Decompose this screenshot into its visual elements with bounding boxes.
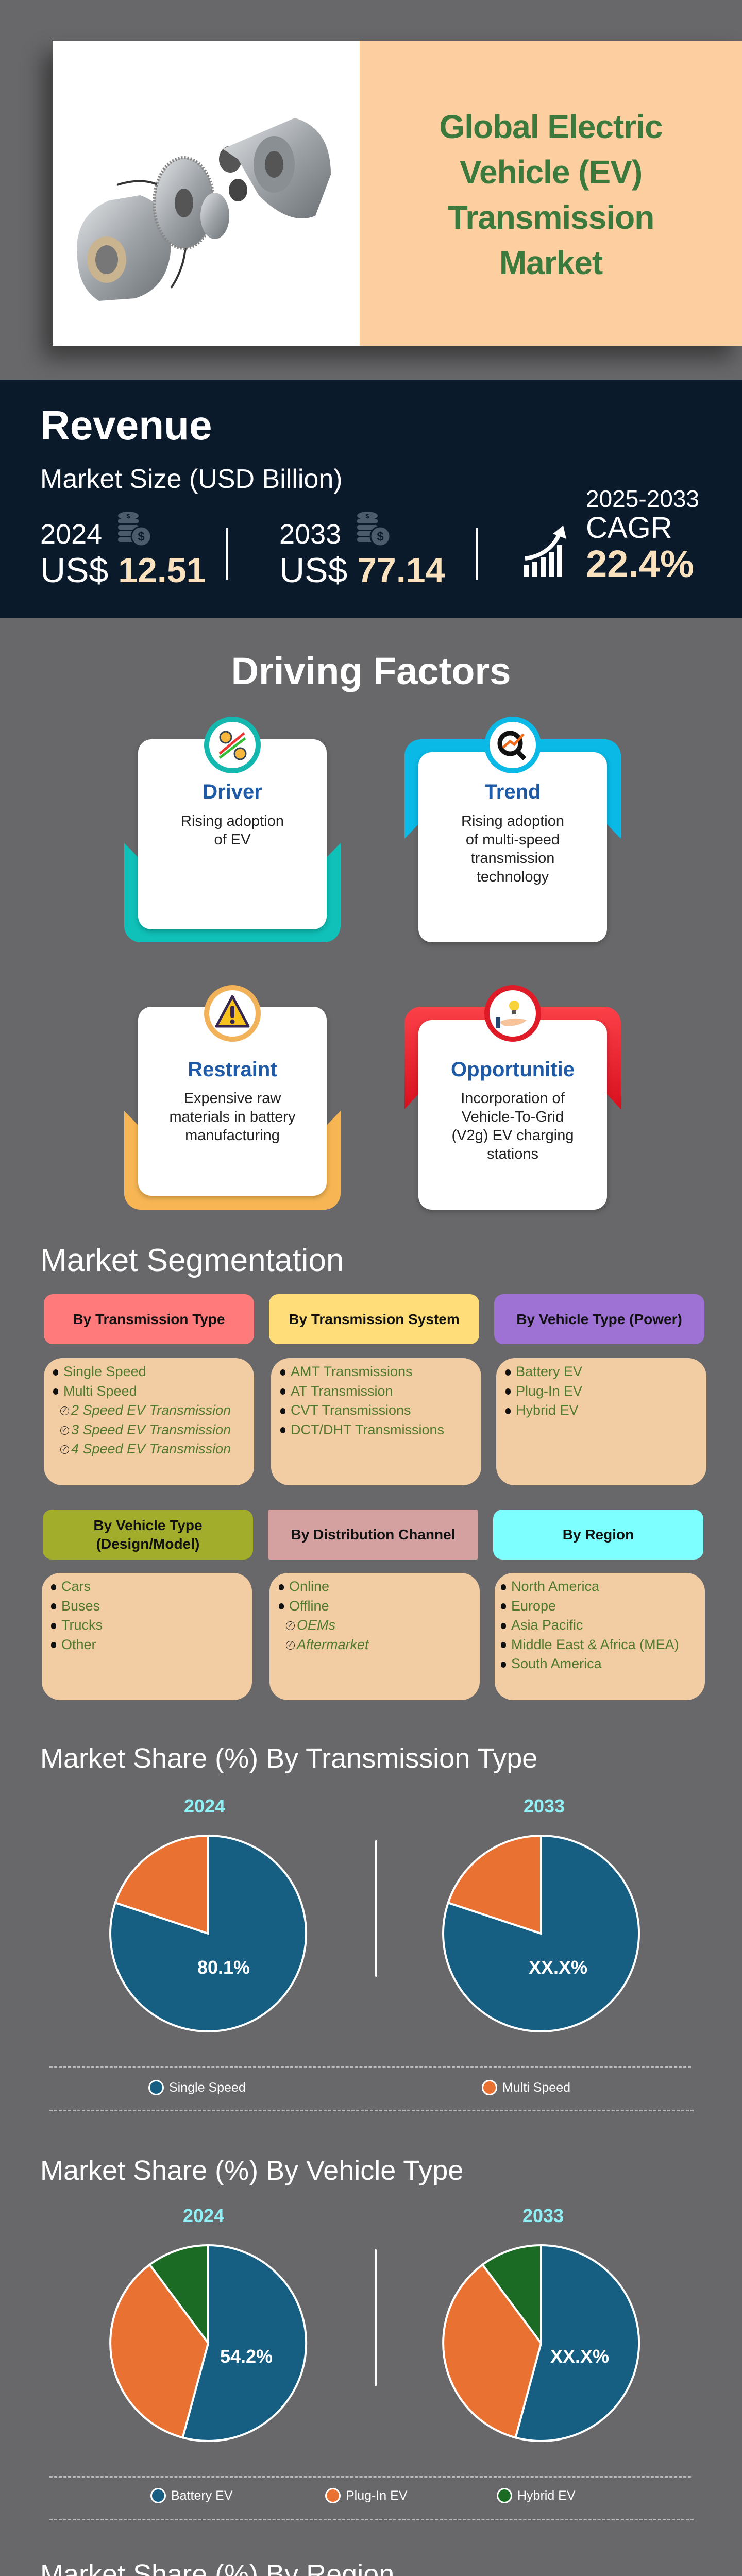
segmentation: region: North America	[511, 1579, 599, 1594]
segmentation: transmission type: Single Speed	[63, 1364, 146, 1379]
icon: coins: $	[138, 530, 145, 544]
title: Vehicle (EV)	[460, 154, 642, 191]
segmentation: transmission type: By Transmission Type	[73, 1311, 225, 1327]
CAGR: 22.4%	[586, 543, 694, 585]
panel: opportunity: (V2g) EV charging	[452, 1127, 574, 1144]
icon: coins: $	[127, 513, 130, 520]
segmentation: distribution channel: OEMs	[297, 1617, 335, 1633]
segmentation: region: Middle East & Africa (MEA)	[511, 1636, 679, 1652]
panel: restraint	[124, 985, 341, 1210]
panel: restraint: materials in battery	[169, 1109, 296, 1125]
segmentation: vehicle type design	[42, 1510, 253, 1700]
segmentation: vehicle type power: Plug-In EV	[516, 1383, 582, 1398]
text: 2033	[522, 2205, 564, 2226]
legend: transmission	[148, 2080, 570, 2095]
segmentation: region: South America	[511, 1656, 602, 1671]
pie chart: transmission 2033	[442, 1835, 640, 2032]
legend: vehicle: Hybrid EV	[517, 2488, 576, 2503]
CAGR: CAGR	[586, 511, 672, 545]
segmentation: vehicle type power: Battery EV	[516, 1364, 582, 1379]
title: Market	[499, 244, 602, 281]
icon: coins	[118, 512, 150, 545]
segmentation: distribution channel: Offline	[289, 1598, 329, 1614]
panel: trend: Rising adoption	[461, 813, 564, 829]
segmentation: distribution channel: Online	[289, 1579, 329, 1594]
text: 2033	[524, 1795, 565, 1817]
icon: coins	[357, 512, 390, 545]
pie chart: transmission 2024	[109, 1835, 307, 2032]
revenue heading: Revenue	[40, 402, 212, 448]
panel: driver: of EV	[214, 832, 250, 848]
legend: vehicle: Plug-In EV	[346, 2488, 408, 2503]
panel: driver: Driver	[203, 781, 262, 803]
segmentation: distribution channel: By Distribution Channel	[291, 1526, 455, 1543]
pie chart: transmission 2033: XX.X%	[529, 1957, 587, 1978]
segmentation: transmission type	[44, 1294, 254, 1485]
segmentation: vehicle type design: By Vehicle Type	[93, 1517, 203, 1533]
panel: driver	[124, 717, 341, 942]
pie chart: vehicle 2033	[442, 2244, 640, 2442]
segmentation: transmission system	[269, 1294, 481, 1485]
icon: warning	[204, 985, 261, 1042]
segmentation: vehicle type design: Buses	[61, 1598, 100, 1614]
CAGR	[586, 485, 699, 585]
segmentation: region: Asia Pacific	[511, 1617, 583, 1633]
segmentation: transmission type: Multi Speed	[63, 1383, 137, 1398]
segmentation: vehicle type power: Hybrid EV	[516, 1402, 579, 1418]
2024 value: 2024	[40, 519, 102, 550]
driving factors heading: Driving Factors	[231, 650, 511, 692]
segmentation: transmission system: By Transmission System	[289, 1311, 460, 1327]
segmentation: distribution channel	[268, 1510, 480, 1700]
segmentation: region: By Region	[563, 1526, 634, 1543]
pie chart: vehicle 2033: XX.X%	[550, 2346, 609, 2367]
panel: trend: technology	[477, 869, 549, 885]
2033 value: 2033	[279, 519, 341, 550]
2024 value: US$ 12.51	[40, 551, 206, 590]
panel: opportunity	[404, 985, 621, 1213]
pie chart: vehicle 2024: 54.2%	[220, 2346, 273, 2367]
title: Global Electric	[439, 108, 663, 145]
text: 2024	[184, 1795, 225, 1817]
segmentation: transmission system: DCT/DHT Transmissions	[291, 1422, 444, 1437]
panel: driver: Rising adoption	[181, 813, 284, 829]
icon: opportunity	[484, 985, 541, 1042]
segmentation: vehicle type design: Cars	[61, 1579, 91, 1594]
market size label: Market Size (USD Billion)	[40, 464, 343, 494]
panel: opportunity: Vehicle-To-Grid	[462, 1109, 564, 1125]
2033 value	[279, 512, 445, 590]
segmentation: transmission type: 3 Speed EV Transmission	[71, 1422, 231, 1437]
panel: trend: Trend	[485, 781, 541, 803]
segmentation: vehicle type design: Trucks	[61, 1617, 103, 1633]
panel: opportunity: stations	[487, 1146, 538, 1162]
icon: coins: $	[377, 530, 384, 544]
segmentation: transmission system: AT Transmission	[291, 1383, 393, 1398]
segmentation: vehicle type power	[494, 1294, 706, 1485]
icon: driver	[204, 717, 261, 773]
segmentation: transmission type: 4 Speed EV Transmission	[71, 1441, 231, 1456]
2024 value	[40, 512, 206, 590]
2033 value: US$ 77.14	[279, 551, 445, 590]
segmentation: transmission system: CVT Transmissions	[291, 1402, 411, 1418]
CAGR: 2025-2033	[586, 485, 699, 512]
panel: trend	[404, 717, 621, 946]
panel: opportunity: Incorporation of	[461, 1090, 565, 1107]
text: 2024	[183, 2205, 224, 2226]
gearbox illustration	[53, 41, 360, 346]
revenue panel	[0, 380, 742, 618]
icon: coins: $	[366, 513, 369, 520]
panel: restraint: Expensive raw	[184, 1090, 281, 1107]
segmentation: vehicle type design: Other	[61, 1636, 96, 1652]
pie chart: vehicle 2024	[109, 2244, 307, 2442]
segmentation: vehicle type design: (Design/Model)	[96, 1535, 199, 1552]
segmentation: vehicle type power: By Vehicle Type (Power)	[516, 1311, 682, 1327]
legend: transmission: Single Speed	[169, 2080, 246, 2095]
legend: transmission: Multi Speed	[502, 2080, 570, 2095]
icon: trend	[485, 717, 541, 773]
market segmentation heading: Market Segmentation	[40, 1243, 344, 1278]
pie chart: transmission 2024: 80.1%	[197, 1957, 250, 1978]
panel: trend: of multi-speed	[466, 832, 560, 848]
world map	[0, 2463, 742, 2576]
legend: vehicle	[150, 2488, 576, 2503]
panel: opportunity: Opportunitie	[451, 1058, 575, 1081]
segmentation: region: Europe	[511, 1598, 556, 1614]
header card	[53, 41, 742, 346]
title: Transmission	[448, 199, 654, 236]
title	[360, 41, 742, 346]
heading: transmission share: Market Share (%) By Transmission Type	[40, 1743, 537, 1774]
legend: vehicle: Battery EV	[171, 2488, 233, 2503]
panel: restraint: Restraint	[188, 1058, 277, 1081]
segmentation: distribution channel: Aftermarket	[297, 1636, 369, 1652]
panel: trend: transmission	[471, 850, 554, 867]
segmentation: transmission type: 2 Speed EV Transmission	[71, 1402, 231, 1418]
heading: vehicle share: Market Share (%) By Vehicle Type	[40, 2155, 463, 2186]
segmentation: transmission system: AMT Transmissions	[291, 1364, 413, 1379]
icon: growth arrow	[524, 526, 566, 577]
segmentation: region	[493, 1510, 705, 1700]
panel: restraint: manufacturing	[185, 1127, 280, 1144]
